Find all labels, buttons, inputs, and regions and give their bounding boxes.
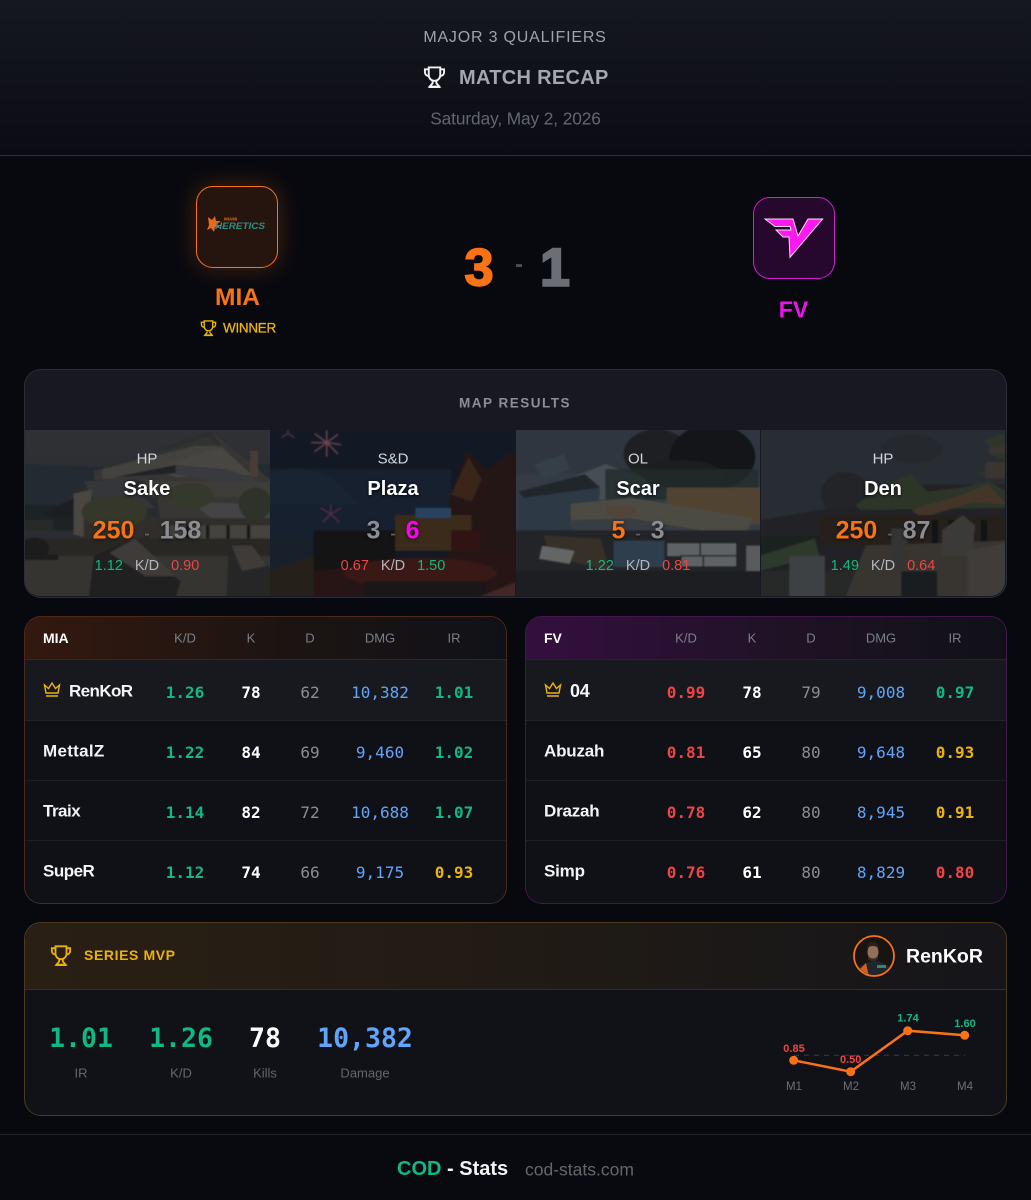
stats: 80	[801, 803, 821, 822]
stats: 1.12	[166, 863, 204, 882]
map card: Sake	[25, 430, 270, 596]
stats	[166, 863, 473, 882]
player name: MettalZ	[43, 742, 105, 760]
stats: 0.99	[667, 683, 705, 702]
player name: Abuzah	[544, 742, 604, 760]
map score: 3 - 6	[366, 516, 420, 544]
map image: Sake	[25, 430, 270, 596]
map name: Den: Den	[864, 478, 902, 500]
map K/D	[95, 558, 199, 574]
heading: match recap: MATCH RECAP	[459, 67, 609, 89]
heading: map results: MAP RESULTS	[459, 395, 571, 410]
value: 1.26	[149, 1023, 213, 1054]
stats: 80	[801, 743, 821, 762]
MVP stat: IR	[49, 1023, 113, 1080]
row: Traix	[25, 781, 508, 841]
map card: Plaza	[270, 430, 515, 596]
stats: 78	[742, 683, 762, 702]
stats: 62	[300, 683, 320, 702]
stats: 9,008	[857, 683, 905, 702]
line chart: K/D per map: M2	[843, 1081, 859, 1093]
stats: 1.26	[166, 683, 204, 702]
map K/D: 1.12	[95, 558, 123, 574]
map name: Plaza: Plaza	[367, 478, 419, 500]
value: 1.01	[49, 1023, 113, 1054]
team: FV	[753, 197, 835, 322]
stats: 1.07	[435, 803, 473, 822]
winner label: WINNER	[223, 320, 276, 335]
team name: MIA: MIA	[215, 284, 260, 311]
map score: 250 - 87	[836, 516, 930, 544]
line chart: K/D per map: M3	[900, 1081, 916, 1093]
stats: 80	[801, 863, 821, 882]
label: K/D	[170, 1066, 192, 1080]
icon: MVP trophy	[50, 945, 72, 966]
stats	[166, 743, 473, 762]
mode: S&D: S&D	[378, 450, 408, 468]
icon: header trophy	[424, 66, 446, 88]
line chart: K/D per map	[770, 1005, 990, 1100]
team label: FV	[544, 630, 562, 646]
stats: 9,648	[857, 743, 905, 762]
header band	[0, 0, 1031, 156]
stats: 0.78	[667, 803, 705, 822]
stats	[667, 863, 974, 882]
map score: 5 - 3	[611, 516, 665, 544]
stats: 0.80	[936, 863, 974, 882]
stats: 0.91	[936, 803, 974, 822]
line chart: K/D per map: M1	[786, 1081, 802, 1093]
MVP header	[25, 923, 1008, 990]
row: SupeR	[43, 862, 473, 882]
logo: FV	[753, 197, 835, 279]
row: Drazah	[526, 781, 1008, 841]
value: 78	[249, 1023, 281, 1054]
stats: 10,382	[351, 683, 409, 702]
stats: 0.97	[936, 683, 974, 702]
score: MIA: 3	[464, 238, 494, 298]
stats: 0.93	[435, 863, 473, 882]
footer	[0, 1134, 1031, 1200]
map K/D: 0.67	[341, 558, 369, 574]
column labels: K/D	[174, 630, 196, 646]
player name: Drazah	[544, 802, 600, 820]
column labels: IR	[948, 630, 962, 646]
map card: Scar	[516, 430, 760, 574]
stats: 8,829	[857, 863, 905, 882]
panel: FV scoreboard	[525, 616, 1007, 904]
site URL: cod-stats.com	[525, 1159, 634, 1179]
column labels: K	[247, 630, 255, 646]
stats: 9,175	[356, 863, 404, 882]
column labels: D	[305, 630, 315, 646]
logo: Miami Heretics	[196, 186, 278, 268]
map K/D: 1.50	[417, 558, 445, 574]
stats: 78	[241, 683, 261, 702]
map K/D: 1.49	[831, 558, 859, 574]
map image: Plaza	[270, 430, 515, 596]
MVP stat: Damage	[305, 1018, 425, 1088]
column labels: K	[748, 630, 756, 646]
row: Simp	[544, 862, 974, 882]
stats: 0.81	[667, 743, 705, 762]
table header: MIA	[25, 617, 508, 660]
panel: MIA scoreboard	[24, 616, 507, 904]
stats: 82	[241, 803, 261, 822]
stats	[667, 803, 974, 822]
line chart: K/D per map: 1.60	[954, 1018, 976, 1030]
stats: 0.93	[936, 743, 974, 762]
label: Damage	[340, 1066, 390, 1080]
row: 04	[526, 660, 1008, 721]
column labels	[174, 630, 460, 646]
stats: 0.76	[667, 863, 705, 882]
stats: 8,945	[857, 803, 905, 822]
stats	[166, 683, 473, 702]
stats: 10,688	[351, 803, 409, 822]
map K/D: 0.90	[171, 558, 199, 574]
MVP avatar	[853, 935, 895, 977]
team label: MIA	[43, 630, 69, 646]
table header: FV	[526, 617, 1008, 660]
stats: 74	[241, 863, 261, 882]
MVP stat: Kills	[249, 1023, 281, 1080]
line chart: K/D per map: 0.85	[783, 1043, 805, 1055]
panel: series MVP	[24, 922, 1007, 1116]
map card: Den	[761, 430, 1005, 596]
line chart: K/D per map: 0.50	[840, 1054, 861, 1066]
line chart: K/D per map: 1.74	[897, 1012, 920, 1024]
team name: FV: FV	[779, 296, 808, 322]
stats: 69	[300, 743, 320, 762]
map name: Sake: Sake	[124, 478, 170, 500]
team: MIA	[184, 174, 290, 336]
column labels: K/D	[675, 630, 697, 646]
map K/D: K/D	[135, 558, 159, 574]
stats: 9,460	[356, 743, 404, 762]
stats: 1.22	[166, 743, 204, 762]
stats: 1.02	[435, 743, 473, 762]
event title: MAJOR 3 QUALIFIERS	[423, 29, 607, 46]
column labels: IR	[448, 630, 460, 646]
map score: 250 - 158	[93, 516, 201, 544]
MVP name: RenKoR	[906, 945, 983, 967]
map K/D: 1.22	[586, 558, 614, 574]
line chart: K/D per map: M4	[957, 1081, 974, 1093]
map K/D: K/D	[626, 558, 650, 574]
player name: Simp	[544, 862, 585, 880]
player name: 04	[570, 681, 590, 701]
value: 10,382	[317, 1023, 413, 1054]
row: RenKoR	[25, 660, 508, 721]
map K/D: 0.64	[907, 558, 935, 574]
stats	[667, 743, 974, 762]
MVP stat: K/D	[149, 1023, 213, 1080]
player name: SupeR	[43, 862, 94, 880]
score: FV: 1	[540, 238, 570, 298]
brand: COD - Stats	[397, 1158, 508, 1180]
stats: 66	[300, 863, 320, 882]
icon: crown	[544, 682, 562, 697]
logo: Miami Heretics: MIAMI	[224, 216, 237, 222]
column labels: DMG	[866, 630, 896, 646]
column labels	[675, 630, 962, 646]
stats: 61	[742, 863, 762, 882]
map K/D: K/D	[871, 558, 895, 574]
mode: HP: HP	[137, 450, 157, 468]
map image: Den	[761, 430, 1005, 596]
row: Abuzah	[526, 721, 1008, 781]
map name: Scar: Scar	[616, 478, 660, 500]
player name: RenKoR	[69, 682, 132, 700]
logo: Miami Heretics: HERETICS	[215, 221, 266, 232]
map K/D: 0.81	[662, 558, 690, 574]
stats: 79	[801, 683, 821, 702]
stats: 65	[742, 743, 762, 762]
stats	[166, 803, 473, 822]
player name: Traix	[43, 802, 80, 820]
match date: Saturday, May 2, 2026	[430, 108, 601, 128]
winner badge	[200, 320, 276, 336]
panel: map results	[24, 369, 1007, 598]
icon: crown	[44, 682, 61, 697]
score dash: -	[515, 251, 523, 278]
stats	[667, 683, 974, 702]
MVP label: SERIES MVP	[84, 947, 176, 963]
stats: 84	[241, 743, 261, 762]
series score	[464, 238, 570, 298]
map K/D	[586, 558, 690, 574]
icon: winner trophy	[200, 320, 216, 336]
map K/D	[341, 558, 445, 574]
map K/D	[831, 558, 935, 574]
column labels: DMG	[365, 630, 395, 646]
mode: OL: OL	[628, 450, 648, 468]
stats: 62	[742, 803, 762, 822]
stats: 1.01	[435, 683, 473, 702]
label: Kills	[253, 1066, 277, 1080]
row: MettalZ	[25, 721, 508, 781]
stats: 72	[300, 803, 320, 822]
column labels: D	[806, 630, 816, 646]
map K/D: K/D	[381, 558, 405, 574]
map image: Scar	[516, 430, 760, 572]
mode: HP: HP	[873, 450, 893, 468]
label: IR	[74, 1066, 88, 1080]
stats: 1.14	[166, 803, 204, 822]
